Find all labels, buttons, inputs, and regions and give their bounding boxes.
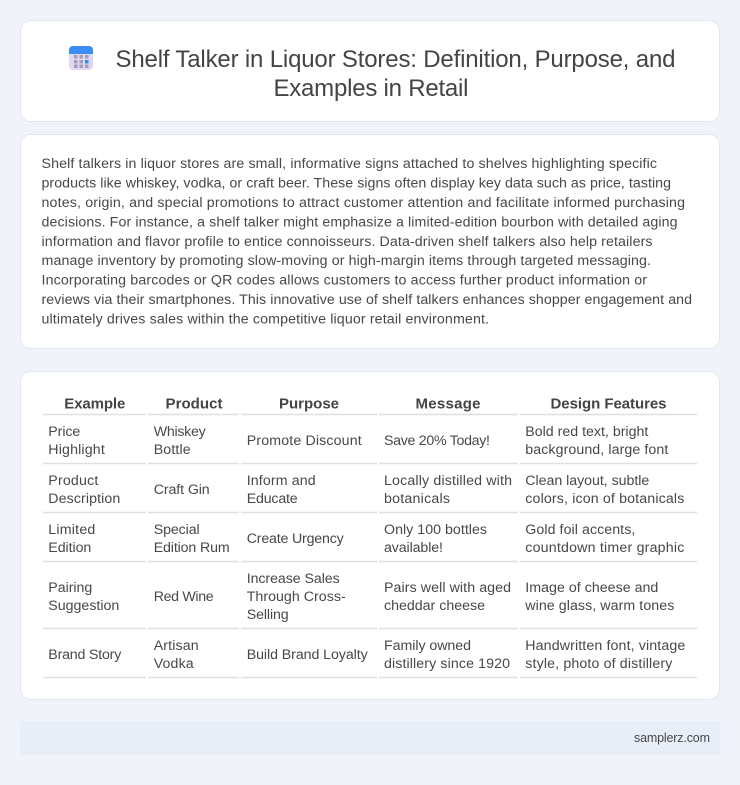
title: Shelf Talker in Liquor Stores: Definition, Purpose, and bbox=[116, 46, 676, 73]
table row: limited edition: available! bbox=[384, 540, 443, 556]
text block: description paragraph: notes, origin, and special promotions to attract customer attention and facilitate informed purchasing bbox=[42, 195, 685, 211]
icon: calendar bbox=[69, 46, 93, 70]
table row: price highlight: Whiskey bbox=[154, 424, 207, 440]
table header row bbox=[43, 396, 697, 414]
text block: description paragraph: manage inventory by promoting slow-moving or high-margin items through targeted messaging. bbox=[42, 253, 651, 269]
table row: limited edition: countdown timer graphic bbox=[525, 540, 684, 556]
table row: pairing suggestion: Pairs well with aged bbox=[384, 580, 511, 596]
table row: brand story: Vodka bbox=[154, 656, 194, 672]
table row: product description: Craft Gin bbox=[154, 482, 210, 498]
table row: pairing suggestion bbox=[43, 571, 697, 628]
text block: description paragraph: decisions. For instance, a shelf talker might emphasize a limited-edition bourbon with detailed aging bbox=[42, 214, 678, 230]
title: Examples in Retail bbox=[274, 75, 468, 102]
table header row: Message bbox=[416, 396, 480, 412]
table row: product description: colors, icon of botanicals bbox=[525, 491, 684, 507]
table row: price highlight: background, large font bbox=[525, 442, 668, 458]
table row: product description: Educate bbox=[247, 491, 298, 507]
table row: pairing suggestion: wine glass, warm tones bbox=[524, 598, 674, 614]
table row: brand story: Artisan bbox=[154, 638, 199, 654]
table row: limited edition: Create Urgency bbox=[247, 531, 345, 547]
table row: limited edition: Only 100 bottles bbox=[384, 522, 487, 538]
table row: pairing suggestion: cheddar cheese bbox=[384, 598, 485, 614]
text block: description paragraph: Incorporating barcodes or QR codes allows customers to access further product information or bbox=[42, 273, 647, 289]
table row: price highlight bbox=[43, 424, 697, 464]
table row: pairing suggestion: Image of cheese and bbox=[525, 580, 658, 596]
table row: pairing suggestion: Red Wine bbox=[154, 589, 214, 605]
table row: limited edition: Gold foil accents, bbox=[525, 522, 635, 538]
table row: brand story: Handwritten font, vintage bbox=[525, 638, 685, 654]
text block: description paragraph: products like whiskey, vodka, or craft beer. These signs often display key data such as price, tasting bbox=[42, 175, 671, 191]
table row: limited edition: Limited bbox=[48, 522, 95, 538]
table row: brand story: Brand Story bbox=[48, 647, 122, 663]
text block: description paragraph: Shelf talkers in liquor stores are small, informative signs attached to shelves highlighting specific bbox=[42, 156, 657, 172]
table row: limited edition: Special bbox=[154, 522, 200, 538]
table row: limited edition bbox=[43, 522, 697, 562]
table row: pairing suggestion: Pairing bbox=[48, 580, 92, 596]
text block: description paragraph bbox=[42, 156, 692, 328]
table row: limited edition: Edition bbox=[48, 540, 91, 556]
table row: pairing suggestion: Suggestion bbox=[48, 598, 119, 614]
table row: price highlight: Save 20% Today! bbox=[384, 433, 490, 449]
table row: product description: Locally distilled with bbox=[384, 473, 512, 489]
panel: header bbox=[20, 20, 720, 122]
table row: price highlight: Bold red text, bright bbox=[525, 424, 648, 440]
text block: description paragraph: information and flavor profile to entice connoisseurs. Data-driven shelf talkers also help retailers bbox=[42, 234, 652, 250]
table row: product description: Clean layout, subtle bbox=[525, 473, 649, 489]
footer: samplerz.com bbox=[634, 731, 710, 745]
panel: examples table bbox=[20, 372, 720, 700]
table header row: Example bbox=[64, 396, 125, 412]
panel: description bbox=[20, 134, 720, 348]
table row: product description bbox=[43, 473, 697, 512]
table row: product description: Product bbox=[48, 473, 98, 489]
table header row: Product bbox=[166, 396, 222, 412]
table row: price highlight: Highlight bbox=[48, 442, 105, 458]
table row: brand story: distillery since 1920 bbox=[384, 656, 510, 672]
table row: price highlight: Promote Discount bbox=[247, 433, 362, 449]
table row: limited edition: Edition Rum bbox=[154, 540, 230, 556]
footer bbox=[20, 721, 720, 755]
table row: brand story: Family owned bbox=[384, 638, 471, 654]
table row: product description: botanicals bbox=[384, 491, 450, 507]
table row: price highlight: Price bbox=[48, 424, 80, 440]
table row: brand story bbox=[43, 638, 697, 678]
table row: pairing suggestion: Increase Sales bbox=[247, 571, 340, 587]
table row: price highlight: Bottle bbox=[154, 442, 191, 458]
table row: brand story: Build Brand Loyalty bbox=[247, 647, 369, 663]
table row: brand story: style, photo of distillery bbox=[525, 656, 673, 672]
text block: description paragraph: reviews via their smartphones. This innovative use of shelf talkers enhances shopper engagement and bbox=[42, 292, 692, 308]
table row: pairing suggestion: Selling bbox=[247, 607, 289, 623]
table header row: Purpose bbox=[279, 396, 339, 412]
table header row: Design Features bbox=[550, 396, 666, 412]
table row: product description: Inform and bbox=[247, 473, 316, 489]
table row: pairing suggestion: Through Cross- bbox=[247, 589, 346, 605]
text block: description paragraph: ultimately drives sales within the competitive liquor retail environment. bbox=[42, 312, 489, 328]
title bbox=[116, 46, 676, 102]
table row: product description: Description bbox=[48, 491, 120, 507]
